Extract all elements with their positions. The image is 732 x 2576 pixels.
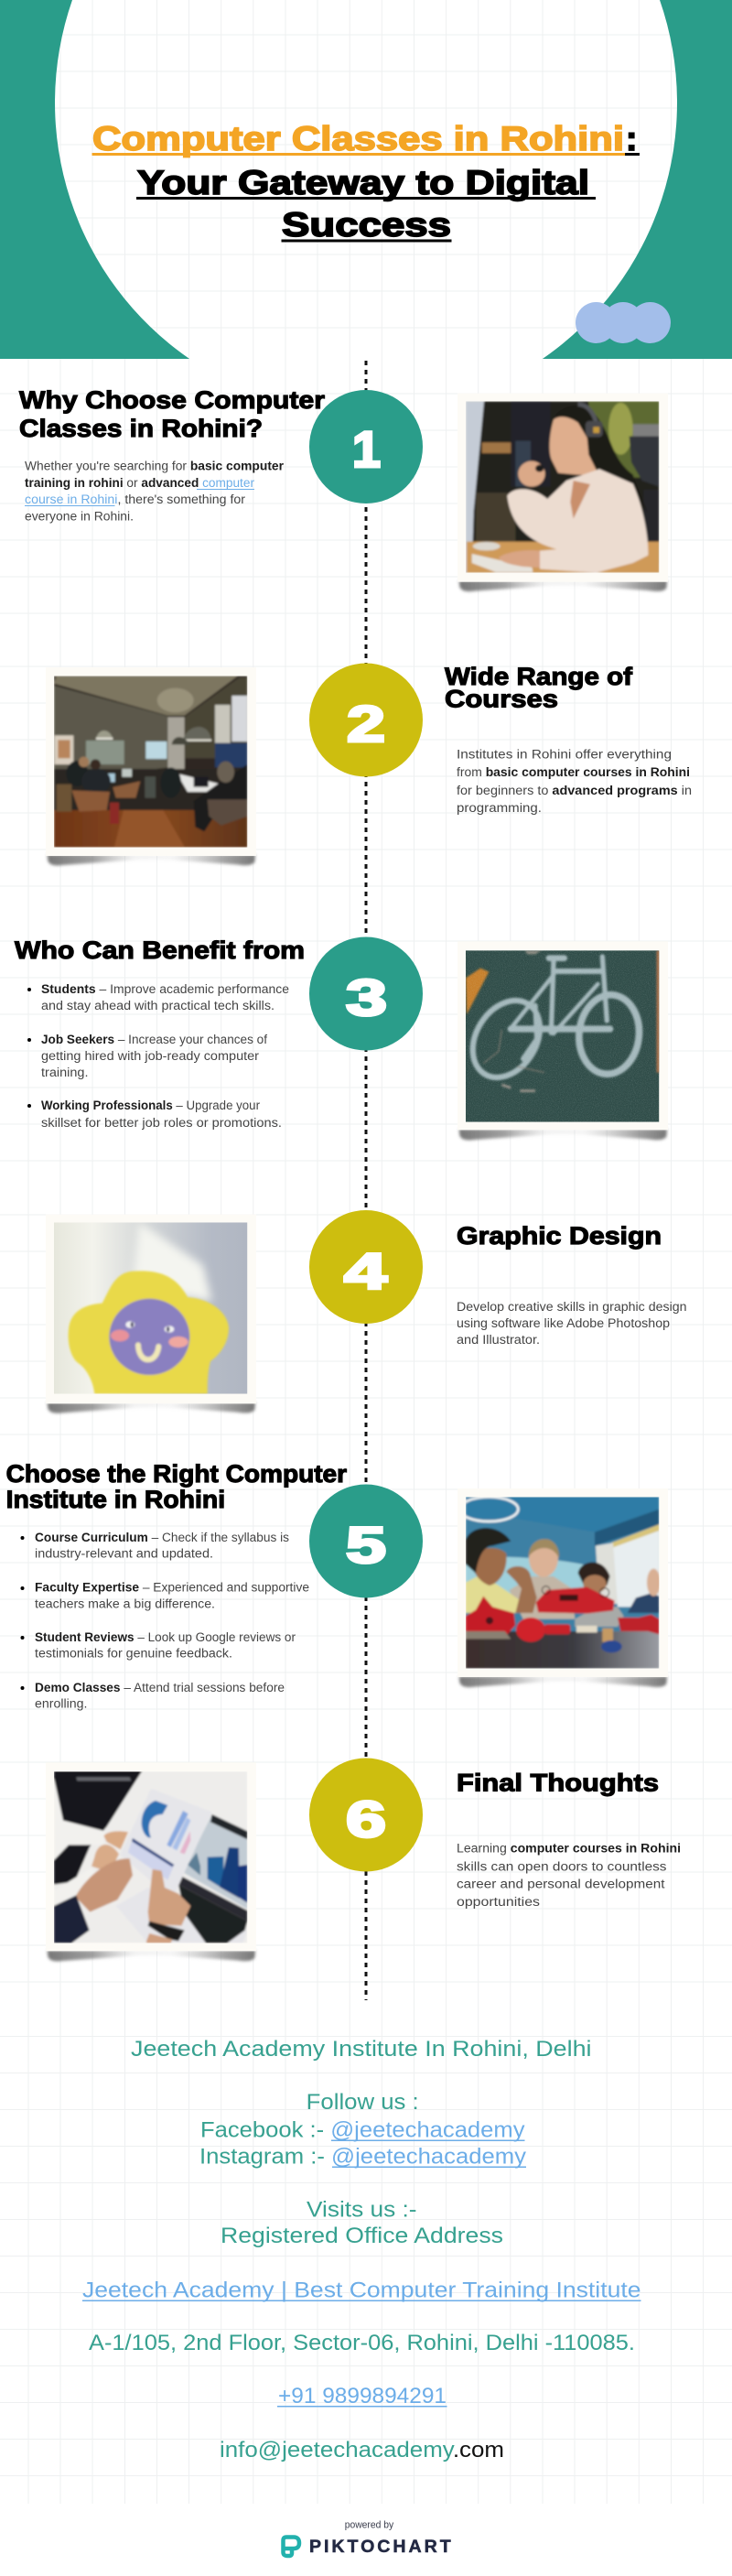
body text: from basic computer courses in Rohini (457, 765, 690, 779)
title (92, 120, 640, 244)
body text: Learning computer courses in Rohini (457, 1842, 681, 1855)
icon: blue scalloped blob (576, 302, 671, 343)
social links: Instagram :- @jeetechacademy (199, 2144, 526, 2170)
photo: painted bicycle on asphalt (458, 941, 668, 1140)
contact footer (82, 2037, 640, 2462)
institute name: Jeetech Academy Institute In Rohini, Delhi (131, 2037, 591, 2062)
social links: Facebook :- @jeetechacademy (200, 2118, 525, 2142)
photo: hands holding charts over laptop (46, 1762, 256, 1961)
bullet list (20, 1531, 309, 1710)
heading: Classes in Rohini? (19, 415, 263, 442)
heading: Choose the Right Computer (6, 1460, 348, 1488)
header banner (0, 0, 732, 359)
title: Success (282, 206, 451, 244)
heading: Why Choose Computer (19, 386, 326, 414)
section 3: who can benefit (15, 936, 668, 1140)
step circle 2: 2 (347, 695, 385, 752)
heading (19, 386, 326, 442)
powered by Piktochart: PIKTOCHART (309, 2537, 451, 2557)
heading: Institute in Rohini (6, 1486, 225, 1513)
bullet list: industry-relevant and updated. (35, 1547, 213, 1560)
title: Computer Classes in Rohini (92, 120, 624, 157)
photo: classroom with lamps (46, 667, 256, 865)
bullet list: Student Reviews – Look up Google reviews or (35, 1630, 296, 1644)
body text: career and personal development (457, 1877, 665, 1891)
bullet list: skillset for better job roles or promotions. (41, 1116, 282, 1130)
social links: Follow us : (307, 2090, 419, 2115)
section 6: final thoughts (46, 1762, 681, 1961)
address (82, 2197, 640, 2355)
section 1: why choose (19, 386, 668, 591)
step circle 4: 4 (344, 1242, 387, 1300)
heading: Wide Range of (445, 663, 633, 690)
step circle 2 (309, 663, 423, 776)
bullet list (27, 982, 289, 1130)
body text (457, 1300, 686, 1347)
title: : (626, 120, 637, 157)
body text: opportunities (457, 1895, 540, 1909)
photo: smiling flower sticker (46, 1215, 256, 1413)
bullet list: Course Curriculum – Check if the syllabus is (35, 1531, 289, 1544)
photo: woman at computer (458, 394, 668, 591)
email: info@jeetechacademy .com (220, 2438, 504, 2462)
section 5: choose the right institute (6, 1460, 668, 1710)
step circle 3: 3 (346, 969, 387, 1026)
body text: using software like Adobe Photoshop (457, 1316, 670, 1330)
body text: and Illustrator. (457, 1333, 540, 1347)
title: Your Gateway to Digital (137, 164, 589, 201)
powered by Piktochart (0, 2504, 732, 2576)
body text: Develop creative skills in graphic design (457, 1300, 686, 1314)
body text: for beginners to advanced programs in (457, 784, 692, 797)
body text (25, 460, 285, 524)
timeline dashed line (364, 361, 368, 2000)
heading (445, 663, 633, 712)
body text: everyone in Rohini. (25, 509, 134, 524)
body text (457, 1842, 681, 1909)
bullet list: Faculty Expertise – Experienced and supportive (35, 1580, 309, 1595)
body text: training in rohini or advanced computer (25, 476, 255, 490)
step circle 4 (309, 1210, 423, 1324)
section 2: wide range (46, 663, 692, 865)
body text (457, 747, 692, 815)
icon: Piktochart logo (284, 2538, 299, 2556)
body text: Institutes in Rohini offer everything (457, 747, 672, 762)
heading: Final Thoughts (457, 1769, 659, 1796)
photo: children with red robots (458, 1488, 668, 1687)
bullet list: Working Professionals – Upgrade your (41, 1099, 260, 1112)
bullet list: Demo Classes – Attend trial sessions before (35, 1681, 285, 1694)
phone: +91 9899894291 (278, 2384, 447, 2408)
step circle 5 (309, 1485, 423, 1598)
body text: course in Rohini , there's something for (25, 492, 246, 506)
address: Registered Office Address (221, 2224, 503, 2248)
section 4: graphic design (46, 1215, 687, 1413)
bullet list: testimonials for genuine feedback. (35, 1646, 232, 1661)
social links (199, 2090, 526, 2170)
heading: Courses (445, 685, 558, 712)
step circle 6: 6 (346, 1791, 386, 1847)
bullet list: Job Seekers – Increase your chances of (41, 1033, 267, 1046)
heading (6, 1460, 348, 1513)
step circle 3 (309, 937, 423, 1051)
address: Jeetech Academy | Best Computer Training Institute (82, 2278, 640, 2303)
powered by Piktochart: powered by (345, 2520, 394, 2531)
step circle 1 (309, 390, 423, 503)
teal arch shape left (0, 0, 189, 359)
heading: Graphic Design (457, 1222, 662, 1250)
step circle 6 (309, 1758, 423, 1871)
address: A-1/105, 2nd Floor, Sector-06, Rohini, Delhi -110085. (89, 2331, 635, 2355)
body text: skills can open doors to countless (457, 1860, 667, 1873)
step circle 5: 5 (346, 1516, 386, 1574)
bullet list: teachers make a big difference. (35, 1596, 215, 1611)
address: Visits us :- (307, 2197, 417, 2223)
heading: Who Can Benefit from (15, 936, 305, 964)
step circle 1: 1 (352, 420, 381, 478)
bullet list: and stay ahead with practical tech skills. (41, 999, 274, 1012)
body text: Whether you're searching for basic computer (25, 460, 285, 472)
bullet list: Students – Improve academic performance (41, 982, 289, 996)
teal arch shape right (543, 0, 732, 359)
bullet list: enrolling. (35, 1697, 88, 1710)
bullet list: training. (41, 1066, 88, 1079)
bullet list: getting hired with job-ready computer (41, 1049, 260, 1063)
body text: programming. (457, 801, 542, 815)
